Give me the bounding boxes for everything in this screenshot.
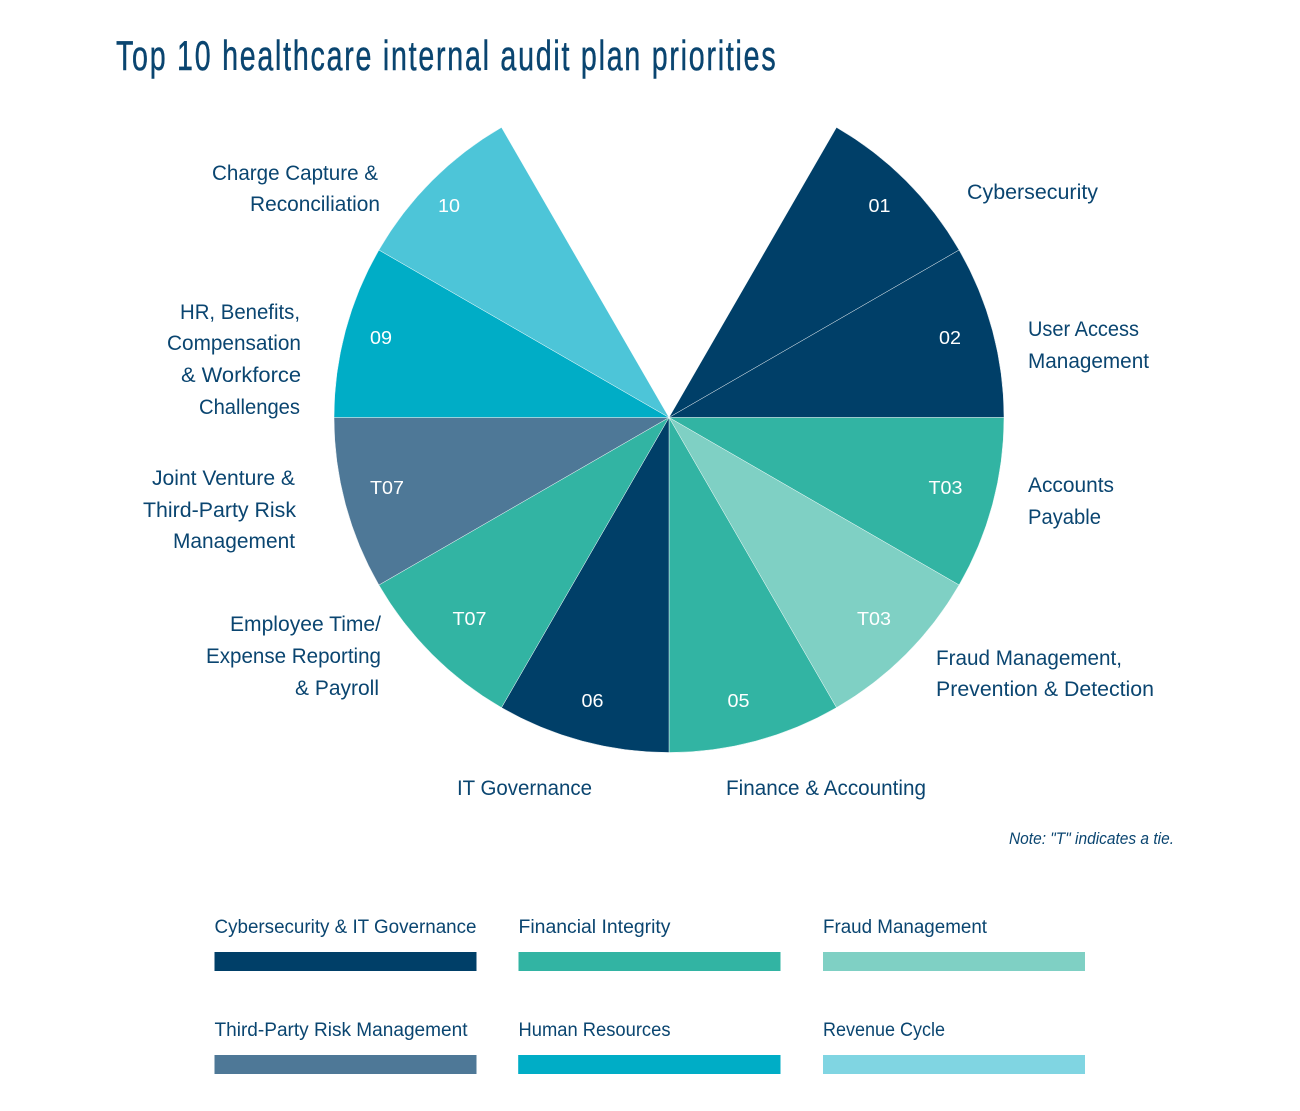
label: HR, Benefits, Compensation & Workforce Challenges: & Workforce	[181, 364, 301, 387]
slice 01 Cybersecurity	[669, 127, 959, 418]
slice numbers: 01	[868, 196, 890, 216]
label: IT Governance: IT Governance	[457, 777, 592, 800]
label: Joint Venture & Third-Party Risk Management: Third-Party Risk	[143, 499, 296, 522]
label: Charge Capture & Reconciliation: Reconciliation	[250, 193, 380, 216]
legend: Fraud Management: Fraud Management	[823, 917, 988, 938]
legend: Fraud Management	[823, 917, 1085, 971]
slice numbers: T07	[452, 609, 486, 629]
slice numbers	[370, 196, 962, 711]
label: HR, Benefits, Compensation & Workforce Challenges: Compensation	[167, 332, 301, 355]
slice T07 Employee Time	[379, 418, 669, 708]
label: HR, Benefits, Compensation & Workforce Challenges: HR, Benefits,	[180, 301, 300, 324]
label: HR, Benefits, Compensation & Workforce Challenges	[167, 301, 301, 419]
slice 05 Finance and Accounting	[669, 418, 836, 752]
label: User Access Management	[1028, 318, 1149, 373]
legend: Financial Integrity	[518, 917, 780, 971]
label: Employee Time/Expense Reporting & Payroll: Employee Time/	[230, 613, 381, 636]
label: Accounts Payable	[1028, 474, 1114, 529]
slice 10 Charge Capture	[379, 127, 669, 418]
title: Top 10 healthcare internal audit plan priorities	[116, 31, 776, 79]
label: Finance & Accounting: Finance & Accounting	[726, 777, 926, 800]
label: Fraud Management, Prevention & Detection	[936, 647, 1154, 701]
label: Accounts Payable: Payable	[1028, 506, 1101, 529]
label: Accounts Payable: Accounts	[1028, 474, 1114, 497]
slice numbers: T07	[370, 478, 404, 498]
label: Charge Capture & Reconciliation: Charge Capture &	[212, 162, 378, 185]
label: User Access Management: Management	[1028, 350, 1149, 373]
label: Fraud Management, Prevention & Detection: Fraud Management,	[936, 647, 1122, 670]
legend: Revenue Cycle	[823, 1020, 1085, 1074]
legend: Cybersecurity & IT Governance: Cybersecurity & IT Governance	[214, 917, 476, 938]
slice T03 Fraud Management	[669, 418, 959, 708]
slice numbers: T03	[857, 609, 891, 629]
label: Fraud Management, Prevention & Detection: Prevention & Detection	[936, 678, 1154, 701]
legend: Third-Party Risk Management: Third-Party Risk Management	[214, 1020, 468, 1041]
label: User Access Management: User Access	[1028, 318, 1139, 341]
slice numbers: 05	[728, 691, 750, 711]
slice numbers: 06	[582, 691, 604, 711]
label: Cybersecurity: Cybersecurity	[967, 181, 1099, 204]
pie chart	[334, 127, 1004, 752]
slice 06 IT Governance	[502, 418, 669, 752]
legend: Human Resources	[518, 1020, 780, 1074]
legend: Cybersecurity & IT Governance	[214, 917, 476, 971]
slice numbers: T03	[928, 478, 962, 498]
legend: Financial Integrity: Financial Integrity	[518, 917, 671, 938]
slice numbers: 10	[438, 196, 460, 216]
note: Note: "T" indicates a tie.	[1009, 829, 1174, 848]
legend: Revenue Cycle: Revenue Cycle	[823, 1020, 945, 1041]
label: HR, Benefits, Compensation & Workforce Challenges: Challenges	[199, 396, 300, 419]
label: Joint Venture & Third-Party Risk Management	[143, 467, 296, 553]
label: Employee Time/Expense Reporting & Payroll: Expense Reporting	[206, 645, 381, 668]
label: Joint Venture & Third-Party Risk Management: Joint Venture &	[152, 467, 295, 490]
slice T07 Joint Venture	[334, 418, 669, 585]
label: Employee Time/Expense Reporting & Payroll: & Payroll	[295, 677, 379, 700]
slice 02 User Access Management	[669, 250, 1004, 418]
legend: Human Resources: Human Resources	[518, 1020, 670, 1041]
slice 09 HR	[334, 250, 669, 418]
legend	[214, 917, 1085, 1074]
label: Joint Venture & Third-Party Risk Management: Management	[173, 530, 295, 553]
legend: Third-Party Risk Management	[214, 1020, 476, 1074]
label: Employee Time/Expense Reporting & Payroll	[206, 613, 381, 700]
slice numbers: 09	[370, 328, 392, 348]
slice T03 Accounts Payable	[669, 418, 1004, 585]
slice numbers: 02	[939, 328, 961, 348]
label: Charge Capture & Reconciliation	[212, 162, 380, 216]
